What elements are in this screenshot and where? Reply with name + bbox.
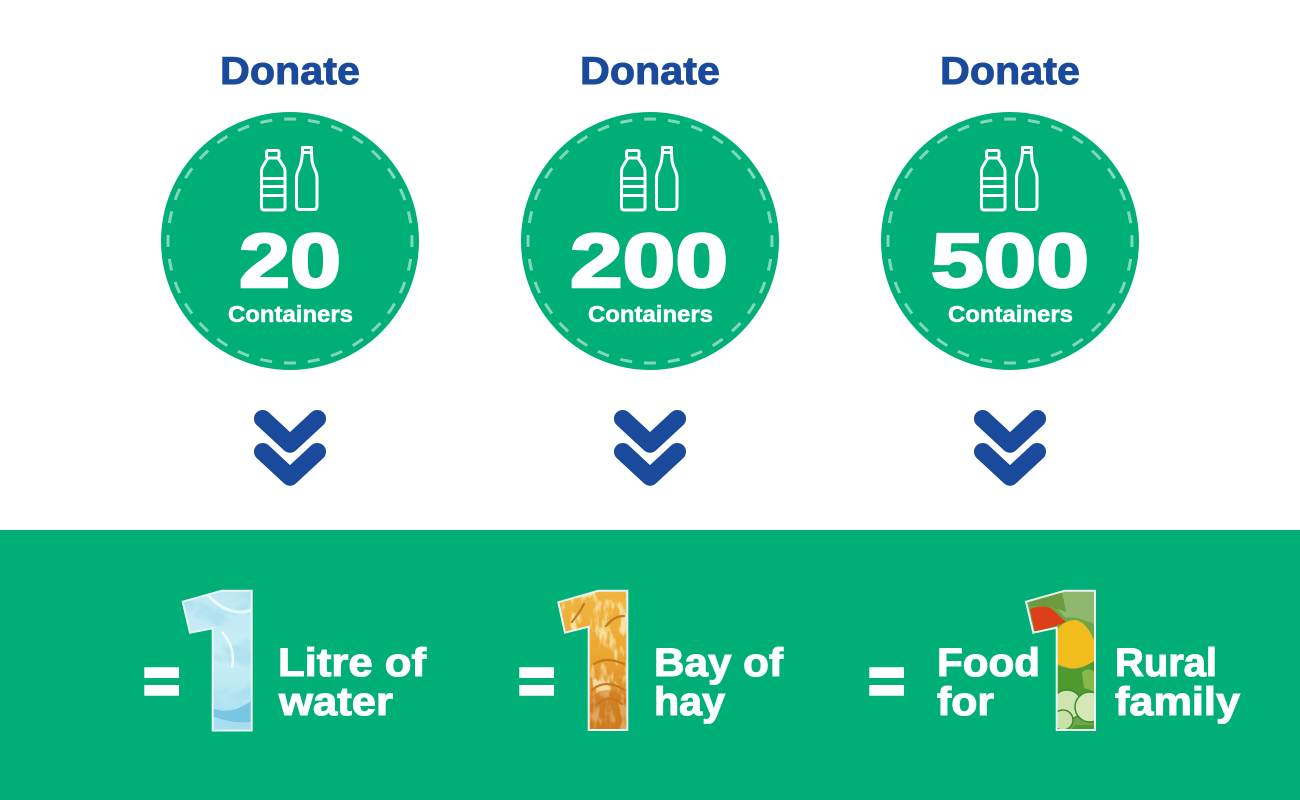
text: Food for: for [937,680,994,724]
equals sign [519,667,554,696]
badge circle [881,112,1139,370]
heading: Donate: Donate [580,50,720,93]
arrow: double chevron down [623,419,677,477]
icon: glass bottle [296,148,317,210]
panel: white background [0,0,1300,530]
text: Litre of water: water [278,680,393,724]
text: Food for: Food [937,641,1040,685]
number 20: 20 [239,219,341,304]
text: Litre of water: Litre of [278,641,427,685]
text: Rural family: Rural [1115,641,1217,685]
number 200: 200 [570,219,728,304]
arrow: double chevron down [263,419,317,477]
heading: Donate: Donate [220,50,360,93]
text: Rural family [1115,641,1241,724]
heading: Donate: Donate [940,50,1080,93]
text: Litre of water [278,641,427,724]
text: Food for [937,641,1040,724]
icon: plastic bottle [622,150,645,210]
column: donate 20 containers [161,50,419,477]
column: donate 500 containers [881,50,1139,477]
dashed ring [168,119,412,363]
badge circle [161,112,419,370]
dashed ring [528,119,772,363]
text: Bay of hay [654,641,784,724]
label: Containers: Containers [228,301,353,327]
panel: green results band [0,530,1300,800]
number 500: 500 [931,219,1089,304]
numeral 1: vegetable texture [1024,590,1096,731]
text: Bay of hay: Bay of [654,641,784,685]
icon: glass bottle [656,148,677,210]
label: Containers: Containers [588,301,713,327]
dashed ring [888,119,1132,363]
equals sign [144,667,179,696]
numeral 1: water texture [180,588,255,733]
text: Bay of hay: hay [654,680,726,724]
icon: plastic bottle [982,150,1005,210]
numeral 1: hay texture [555,588,630,733]
column: donate 200 containers [521,50,779,477]
equals sign [869,667,904,696]
icon: glass bottle [1016,148,1037,210]
result: 1 bay of hay [519,588,784,733]
result: food for 1 rural family [869,588,1241,733]
result: 1 litre of water [144,588,427,733]
arrow: double chevron down [983,419,1037,477]
label: Containers: Containers [948,301,1073,327]
badge circle [521,112,779,370]
text: Rural family: family [1115,680,1241,724]
icon: plastic bottle [262,150,285,210]
